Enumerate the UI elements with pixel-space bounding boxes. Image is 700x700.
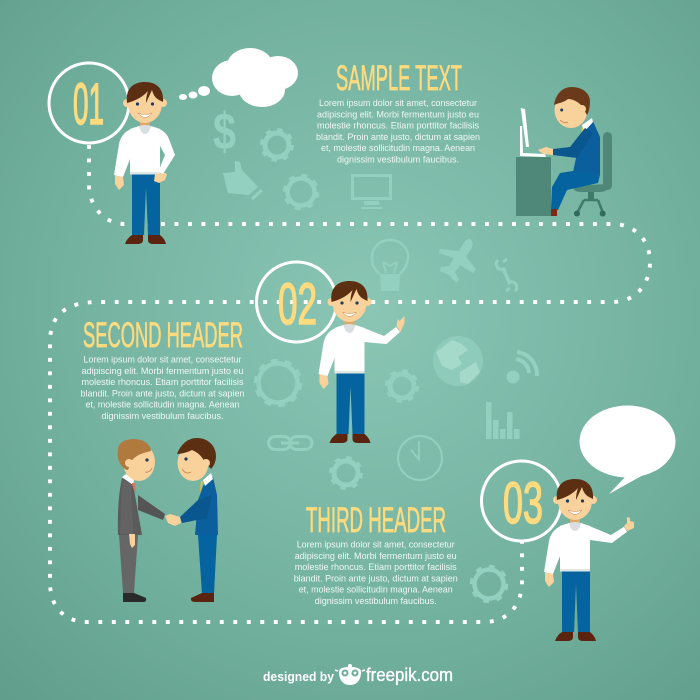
step 01 circle (49, 63, 129, 143)
speech bubble (580, 406, 676, 494)
computer (520, 108, 546, 157)
icon: monitor (352, 176, 390, 209)
text block: third: adipiscing elit. Morbi fermentum justo eu (295, 550, 457, 561)
heading: sample text: SAMPLE TEXT (336, 59, 462, 98)
step 03 circle (482, 461, 562, 541)
text block: second: blandit. Proin ante justo, dictum at sapien (80, 387, 244, 398)
text block: sample (316, 97, 480, 164)
blue man (177, 438, 218, 602)
icon: bar chart (486, 402, 520, 439)
text block: third: Lorem ipsum dolor sit amet, consectetur (297, 538, 455, 550)
step 03 circle: 03 (503, 471, 543, 536)
thought cloud (179, 48, 298, 107)
man at desk (516, 87, 612, 216)
heading: second header: SECOND HEADER (83, 316, 243, 355)
icon: gear bottom center (330, 458, 362, 488)
text block: third: molestie rhoncus. Etiam porttitor facilisis (295, 561, 457, 572)
icon: wrench (496, 259, 517, 291)
hands (165, 514, 181, 526)
step 01 circle: 01 (73, 72, 104, 137)
icon: freepik logo (335, 664, 365, 685)
text block: third: et, molestie sollicitudin magna. Aenean (299, 584, 453, 595)
desk (516, 157, 551, 216)
handshake (118, 438, 218, 602)
text block: third (294, 538, 458, 606)
text block: second: adipiscing elit. Morbi fermentum justo eu (82, 365, 244, 376)
text block: third: dignissim vestibulum faucibus. (315, 595, 437, 606)
heading: third header: THIRD HEADER (306, 501, 446, 540)
footer credit: freepik.com (366, 665, 453, 685)
footer credit (263, 664, 453, 685)
icon: link (268, 436, 312, 450)
icon: gear left (256, 360, 300, 406)
icon: gear bottom right (472, 566, 506, 602)
footer credit: designed by (263, 669, 335, 684)
icon: globe (433, 336, 483, 386)
text block: sample: adipiscing elit. Morbi fermentum justo eu (317, 108, 479, 119)
text block: third: blandit. Proin ante justo, dictum at sapien (294, 572, 458, 583)
icon: gear center (386, 370, 418, 402)
icon: airplane (439, 239, 476, 283)
icon: clock (398, 436, 442, 480)
person 3 (544, 479, 634, 641)
text block: second (80, 354, 244, 421)
text block: second: Lorem ipsum dolor sit amet, consectetur (84, 354, 242, 364)
text block: sample: blandit. Proin ante justo, dictum at sapien (316, 131, 480, 142)
grey man (118, 439, 165, 602)
dotted path (50, 145, 650, 622)
text block: sample: dignissim vestibulum faucibus. (337, 154, 459, 164)
text block: second: et, molestie sollicitudin magna. Aenean (86, 399, 240, 410)
step 02 circle (256, 262, 336, 342)
person 2 (318, 281, 404, 443)
text block: sample: molestie rhoncus. Etiam porttitor facilisis (317, 120, 479, 131)
text block: sample: et, molestie sollicitudin magna. Aenean (321, 142, 475, 153)
text block: second: molestie rhoncus. Etiam porttitor facilisis (82, 376, 244, 387)
icon: thumbs up (223, 161, 262, 199)
text block: second: dignissim vestibulum faucibus. (102, 410, 224, 421)
person 1 (114, 82, 175, 244)
icon: gear top (262, 130, 292, 160)
icon: gear lower (284, 176, 318, 208)
icon: dollar: $ (213, 103, 236, 161)
text block: sample: Lorem ipsum dolor sit amet, consectetur (319, 97, 477, 108)
icon: light bulb (372, 240, 408, 291)
icon: wifi (506, 352, 537, 384)
step 02 circle: 02 (278, 272, 317, 337)
faint icons (213, 103, 537, 602)
chair (572, 132, 612, 216)
